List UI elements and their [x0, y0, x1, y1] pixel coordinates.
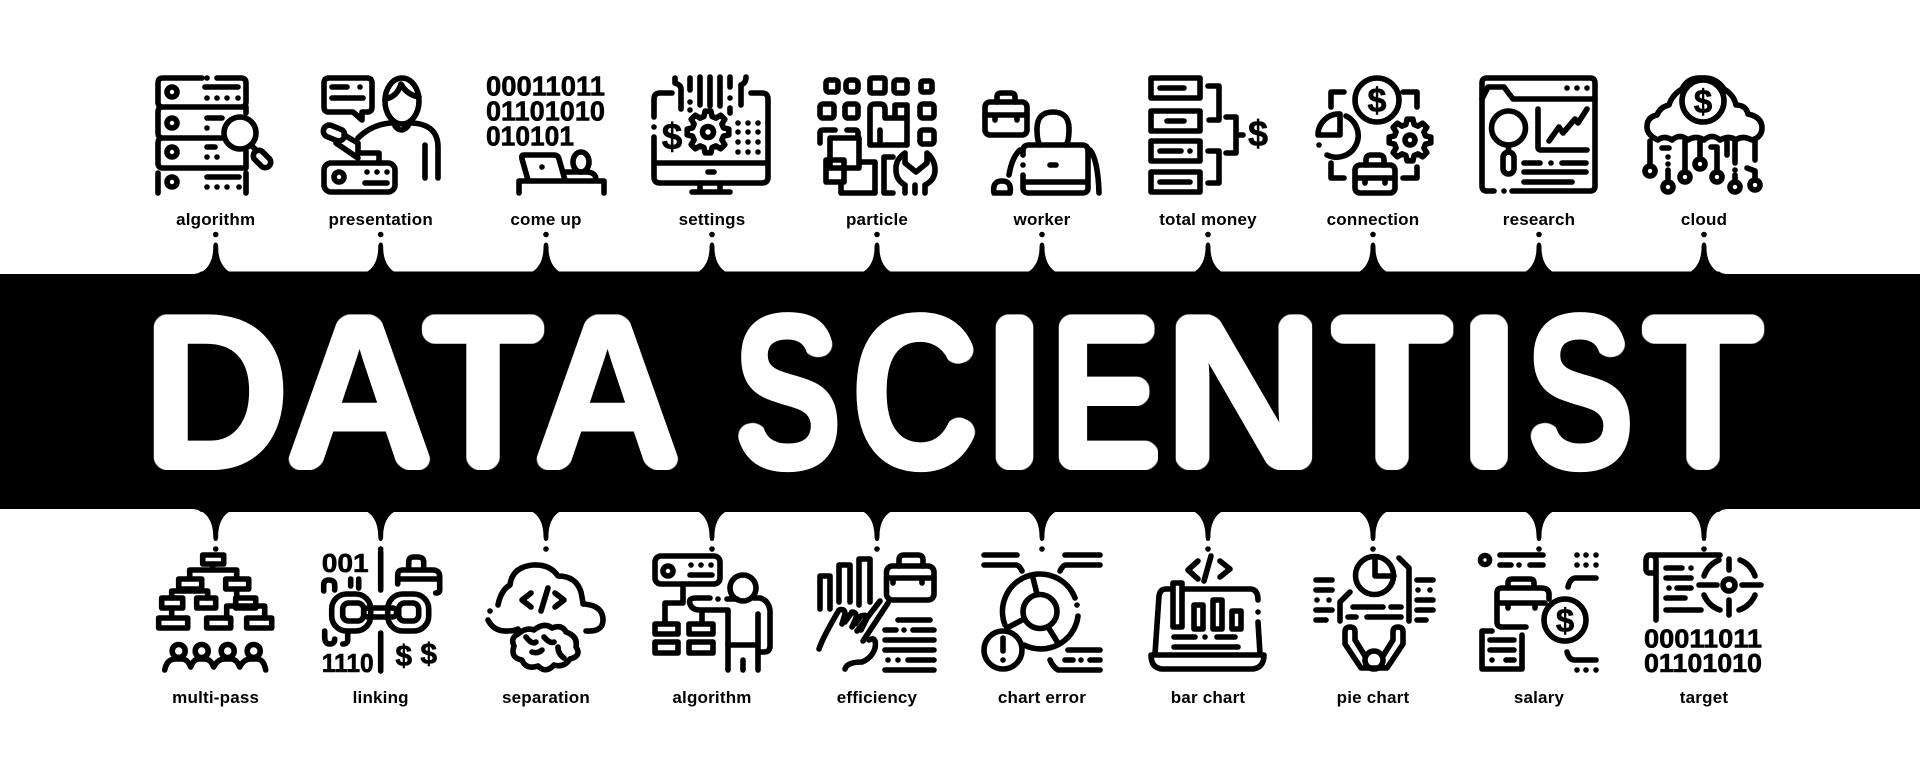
title: A	[530, 269, 685, 514]
title: S	[1526, 269, 1634, 514]
connector	[1193, 511, 1223, 552]
icon: donut chart with alert	[984, 555, 1100, 670]
connector	[697, 511, 727, 552]
icon: scroll with crosshair and digits: 01101010	[1644, 648, 1762, 678]
connector	[366, 232, 396, 272]
icon: cloud with coin and circuit	[1645, 78, 1762, 192]
connector	[1524, 511, 1554, 552]
label: separation	[502, 688, 590, 707]
connector	[531, 232, 561, 272]
label: connection	[1327, 210, 1419, 229]
title: D	[142, 270, 290, 514]
item: algorithm	[158, 78, 273, 272]
title: C	[851, 271, 981, 515]
icon: binary digits and laptop user: 01101010	[486, 96, 605, 126]
title: S	[733, 269, 842, 514]
label: settings	[679, 210, 745, 229]
item: particle	[820, 78, 935, 272]
icon: server rack with magnifier	[158, 78, 273, 193]
item: total money	[1151, 78, 1268, 272]
icon: monitor with gear: $	[662, 116, 683, 157]
title: E	[1049, 270, 1163, 514]
connector	[697, 232, 727, 272]
label: bar chart	[1171, 688, 1245, 707]
connector	[862, 232, 892, 272]
item: cloud	[1645, 78, 1762, 272]
item: bar chart	[1151, 511, 1264, 707]
title: I	[983, 270, 1046, 515]
item: settings	[654, 77, 768, 272]
label: come up	[510, 210, 582, 229]
icon: case, coin and document	[1480, 555, 1596, 670]
icon: cloud with coin and circuit: $	[1694, 83, 1712, 120]
label: linking	[353, 688, 409, 707]
label: particle	[846, 210, 908, 229]
connector	[1689, 232, 1719, 272]
item: worker	[985, 93, 1099, 272]
item: efficiency	[819, 511, 934, 707]
label: efficiency	[837, 688, 918, 707]
label: target	[1680, 688, 1728, 707]
icon: chain link with digits: 1110	[322, 648, 374, 678]
item: linking	[322, 511, 440, 707]
title: A	[282, 269, 437, 514]
icon: chain link with digits	[322, 548, 440, 678]
item: salary	[1480, 511, 1596, 707]
label: total money	[1159, 210, 1257, 229]
label: pie chart	[1337, 688, 1409, 707]
icon: person pointing at flowchart	[655, 556, 770, 670]
item: chart error	[984, 511, 1100, 707]
icon: chain link with digits: $	[420, 638, 437, 671]
label: presentation	[328, 210, 433, 229]
item: research	[1482, 78, 1595, 272]
connector	[1027, 232, 1057, 272]
icon: scroll with crosshair and digits	[1644, 555, 1762, 678]
icon: squares and wrench	[820, 78, 935, 193]
connector	[862, 511, 892, 552]
title: T	[1642, 270, 1764, 514]
label: worker	[1013, 210, 1071, 229]
connector	[366, 511, 396, 552]
icon: chain link with digits: $	[395, 640, 412, 673]
title: T	[1331, 270, 1453, 514]
icon: stacked bars with bracket and dollar	[1151, 78, 1268, 192]
label: algorithm	[176, 210, 255, 229]
connector	[1358, 232, 1388, 272]
icon: hand pointing with bars and case	[819, 555, 934, 670]
icon: person at laptop with briefcase	[985, 93, 1099, 193]
connector	[1027, 511, 1057, 552]
connector	[201, 511, 231, 552]
icon: binary digits and laptop user	[486, 70, 605, 193]
item: presentation	[322, 78, 438, 272]
icon: hierarchy tree with people	[159, 555, 272, 670]
connector	[1524, 232, 1554, 272]
connector	[1689, 511, 1719, 552]
label: research	[1503, 210, 1575, 229]
connector	[1358, 511, 1388, 552]
black title band	[0, 272, 1920, 512]
icon: laptop with bar chart and code	[1151, 556, 1264, 669]
label: cloud	[1681, 210, 1727, 229]
connector	[1193, 232, 1223, 272]
label: algorithm	[672, 688, 752, 707]
title: I	[1458, 270, 1520, 515]
title: N	[1163, 269, 1325, 514]
icon: monitor with gear	[654, 77, 768, 192]
icon: presenter with speech bubble	[322, 78, 438, 192]
icon: binary digits and laptop user: 00011011	[486, 70, 605, 102]
title	[142, 269, 1764, 515]
icon: chain link with digits: 001	[322, 548, 369, 578]
label: multi-pass	[172, 688, 259, 707]
icon: scroll with crosshair and digits: 00011011	[1644, 624, 1762, 654]
item: separation	[488, 511, 603, 707]
icon: cloud with code over brain	[488, 565, 603, 670]
icon: person with pie chart and lists	[1316, 556, 1433, 669]
icon: binary digits and laptop user: 010101	[486, 120, 574, 152]
item: algorithm	[655, 511, 770, 707]
item: come up	[486, 70, 605, 272]
icon: stacked bars with bracket and dollar: $	[1248, 113, 1268, 154]
label: salary	[1514, 688, 1565, 707]
item: multi-pass	[159, 511, 272, 707]
item: target	[1644, 511, 1762, 707]
icon: coin, pie, gear, case	[1318, 78, 1431, 193]
icon: browser window with magnifier and chart	[1482, 78, 1595, 191]
icon: case, coin and document: $	[1556, 602, 1574, 639]
title: T	[422, 270, 544, 514]
label: chart error	[998, 688, 1086, 707]
connector	[201, 232, 231, 272]
item: pie chart	[1316, 511, 1433, 707]
connector	[531, 511, 561, 552]
icon: coin, pie, gear, case: $	[1368, 82, 1387, 120]
item: connection	[1318, 78, 1431, 272]
